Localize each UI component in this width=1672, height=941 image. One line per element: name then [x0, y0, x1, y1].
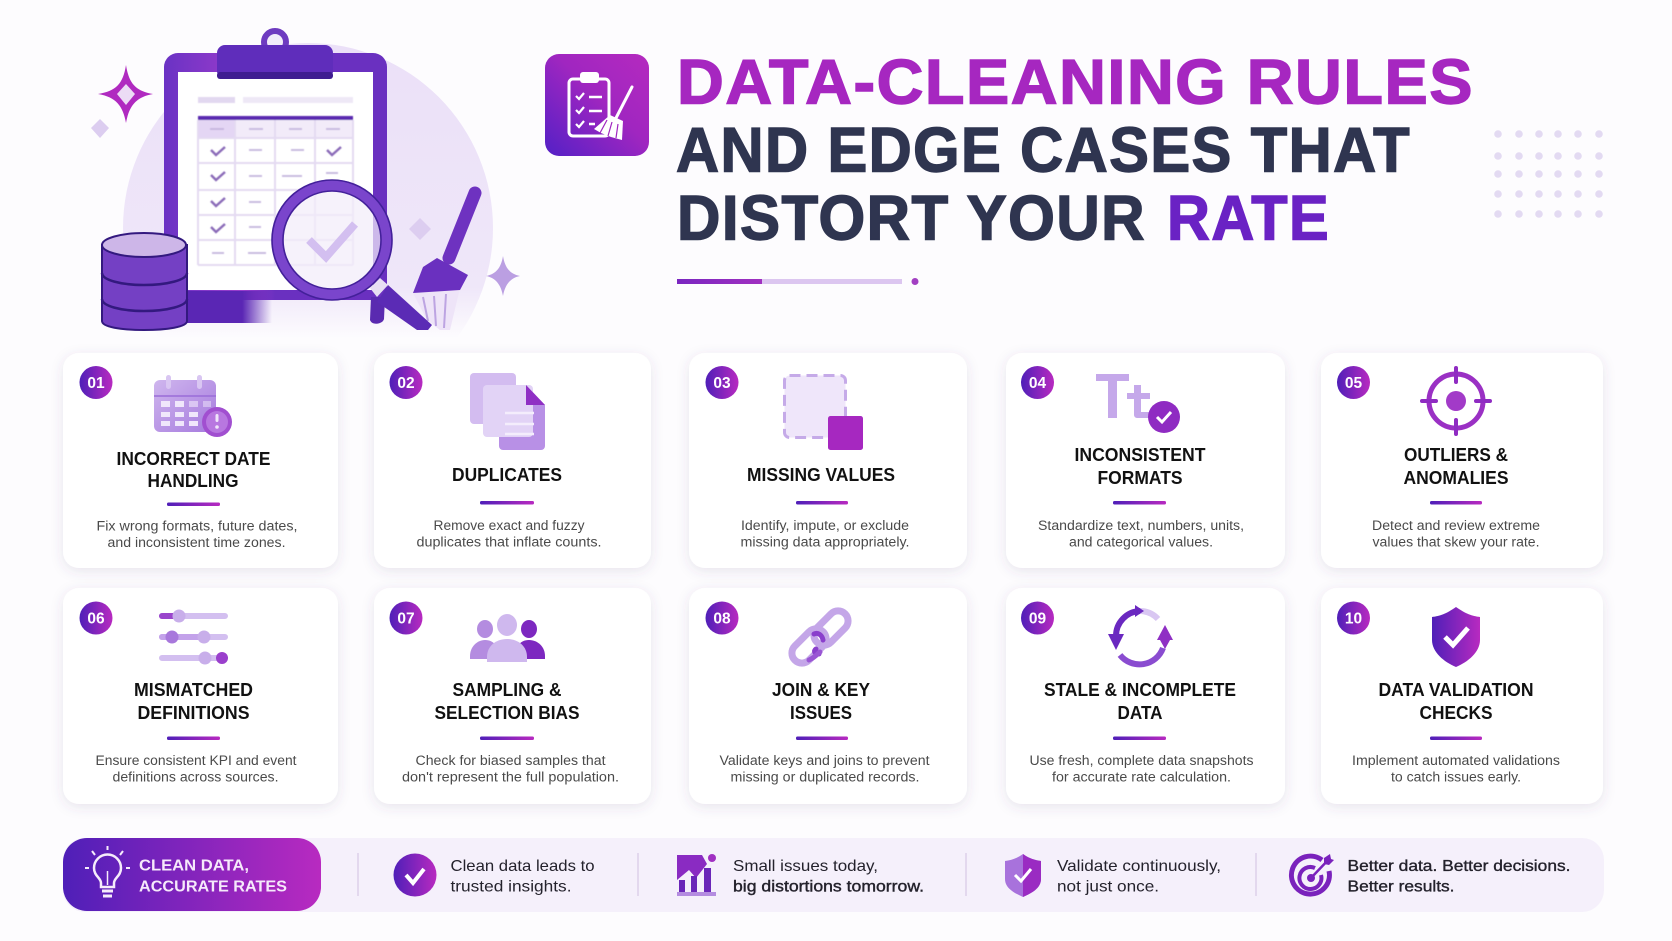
text: small issues [733, 858, 924, 896]
callout: clean data, accurate rates: CLEAN DATA, [139, 858, 249, 874]
paint smudge [187, 291, 272, 323]
text: small issues: big distortions tomorrow. [733, 878, 924, 896]
badge 10: 10 [1345, 610, 1362, 628]
icon: chain link [788, 607, 852, 667]
heading [1378, 680, 1534, 723]
heading: INCORRECT DATE [116, 449, 270, 469]
description [1352, 753, 1560, 784]
description [1038, 518, 1244, 550]
description: Identify, impute, or exclude [741, 518, 909, 533]
panel: 10 data validation checks [1321, 588, 1603, 804]
sparkle: lavender [486, 256, 520, 296]
icon: duplicate documents [470, 373, 545, 450]
database [102, 233, 187, 330]
description: values that skew your rate. [1372, 534, 1540, 550]
description: don't represent the full population. [402, 770, 619, 784]
badge 10 [1337, 602, 1370, 634]
heading: JOIN & KEY [772, 680, 870, 700]
dot grid decoration [1494, 130, 1603, 218]
description [402, 753, 619, 784]
title: AND EDGE CASES THAT [676, 116, 1411, 186]
sparkle: small diamonds [91, 119, 431, 240]
description: definitions across sources. [112, 770, 278, 784]
badge 07: 07 [397, 610, 415, 628]
description [416, 518, 602, 550]
badge 02: 02 [397, 375, 415, 392]
badge 09 [1021, 602, 1054, 634]
description: Implement automated validations [1352, 753, 1560, 768]
heading: INCONSISTENT [1074, 445, 1206, 465]
badge 09: 09 [1029, 610, 1046, 628]
panel: 08 join and key issues [689, 588, 967, 804]
description [1372, 518, 1540, 550]
heading [1044, 680, 1236, 723]
icon: dashed square with filled block [784, 376, 863, 450]
heading: HANDLING [148, 471, 238, 491]
title: DISTORT YOUR [677, 184, 1146, 254]
heading: DATA VALIDATION [1378, 680, 1534, 700]
icon: refresh cycle [1108, 605, 1173, 664]
panel: 03 missing values [689, 353, 967, 568]
heading: DUPLICATES [452, 465, 562, 485]
description: Fix wrong formats, future dates, [96, 518, 298, 534]
panel: 04 inconsistent formats [1006, 353, 1285, 568]
magnifier handle [370, 278, 432, 330]
heading: DATA [1118, 703, 1162, 723]
heading [772, 680, 870, 723]
heading: MISSING VALUES [747, 465, 895, 485]
heading: MISMATCHED [134, 680, 253, 700]
title underline [677, 278, 918, 285]
description: Use fresh, complete data snapshots [1030, 753, 1254, 768]
description: Detect and review extreme [1372, 518, 1540, 533]
heading: SAMPLING & [452, 680, 562, 700]
title: DATA-CLEANING RULES [677, 48, 1474, 118]
description: Check for biased samples that [416, 753, 606, 768]
description: duplicates that inflate counts. [416, 534, 602, 550]
illustration: clipboard with magnifier, database and brush [91, 31, 520, 413]
icon: people group [470, 614, 545, 662]
heading: SELECTION BIAS [434, 703, 580, 723]
description [740, 518, 910, 550]
title [676, 48, 1474, 254]
text: trusted insights [450, 858, 595, 896]
header icon: clipboard and broom [545, 54, 649, 156]
badge 04: 04 [1029, 375, 1046, 392]
badge 01: 01 [87, 375, 105, 392]
sparkle: magenta [98, 65, 153, 123]
description [96, 753, 297, 784]
description [720, 753, 930, 784]
text: better data [1348, 858, 1570, 896]
text: trusted insights: trusted insights. [450, 878, 572, 896]
text: trusted insights: Clean data leads to [450, 858, 595, 875]
text: validate continuously: not just once. [1057, 878, 1159, 896]
magnifying glass [272, 180, 392, 300]
takeaway bar [63, 838, 1604, 912]
callout: clean data, accurate rates: ACCURATE RATES [139, 878, 287, 896]
panel: 06 mismatched definitions [63, 588, 338, 804]
badge 03: 03 [713, 375, 731, 392]
icon: sliders [162, 610, 228, 664]
description: for accurate rate calculation. [1052, 770, 1231, 784]
description: and inconsistent time zones. [108, 535, 286, 550]
icon: chart [677, 854, 716, 896]
description: Remove exact and fuzzy [434, 518, 585, 533]
icon: shield [1005, 854, 1041, 897]
icon: light bulb [85, 846, 130, 896]
heading: ANOMALIES [1404, 468, 1508, 488]
description: to catch issues early. [1391, 770, 1521, 784]
text: better data: Better results. [1348, 878, 1454, 896]
clipboard [164, 31, 387, 300]
icon: shield check [1432, 607, 1480, 667]
heading: STALE & INCOMPLETE [1044, 680, 1236, 700]
heading: DEFINITIONS [138, 703, 250, 723]
badge 08: 08 [713, 610, 731, 628]
text: better data: Better data. Better decisions. [1348, 858, 1570, 875]
heading [434, 680, 580, 723]
description: Validate keys and joins to prevent [720, 753, 930, 768]
icon: target with arrow [1291, 854, 1334, 894]
description: Standardize text, numbers, units, [1038, 518, 1244, 533]
text: validate continuously: Validate continuously, [1057, 858, 1221, 875]
badge 01 [80, 366, 112, 399]
description [96, 518, 298, 550]
badge 05: 05 [1345, 375, 1362, 392]
badge 03 [706, 366, 738, 399]
description: missing or duplicated records. [730, 770, 920, 784]
heading: CHECKS [1420, 703, 1492, 723]
title: RATE [1167, 184, 1330, 254]
badge 06 [80, 602, 112, 634]
panel: 02 duplicates [374, 353, 651, 568]
heading: OUTLIERS & [1404, 445, 1508, 465]
icon: typography with check [1096, 374, 1180, 433]
heading [134, 680, 253, 723]
heading: FORMATS [1098, 468, 1182, 488]
description: missing data appropriately. [740, 534, 910, 550]
panel: 07 sampling and selection bias [374, 588, 651, 804]
badge 05 [1337, 366, 1370, 399]
brush [413, 193, 475, 330]
description: and categorical values. [1069, 534, 1213, 550]
panel: 05 outliers and anomalies [1321, 353, 1603, 568]
text: small issues: Small issues today, [733, 858, 878, 875]
badge 08 [706, 602, 738, 634]
heading [1404, 445, 1508, 488]
heading [116, 449, 270, 491]
badge 04 [1021, 366, 1054, 399]
badge 07 [390, 602, 422, 634]
icon: calendar with alert [154, 375, 232, 437]
icon: check circle [394, 854, 436, 896]
panel: 01 incorrect date handling [63, 353, 338, 568]
heading [1074, 445, 1206, 488]
callout: clean data, accurate rates [63, 838, 321, 911]
background circle [123, 43, 493, 413]
badge 06: 06 [87, 610, 105, 628]
heading: ISSUES [790, 703, 852, 723]
description [1030, 753, 1254, 784]
icon: target crosshair [1422, 368, 1490, 434]
badge 02 [390, 366, 422, 399]
text: validate continuously [1057, 858, 1221, 896]
panel: 09 stale and incomplete data [1006, 588, 1285, 804]
description: Ensure consistent KPI and event [96, 753, 297, 768]
